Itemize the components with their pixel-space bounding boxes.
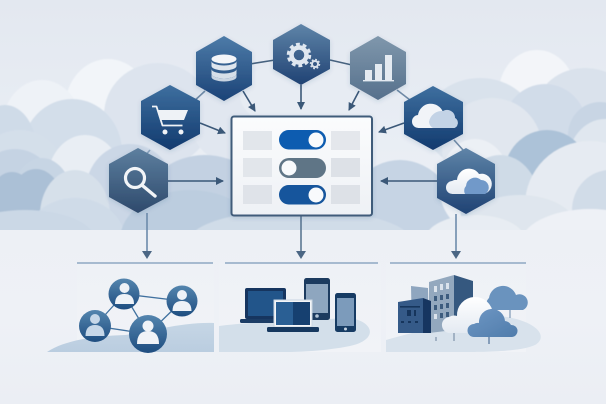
right cloud bank <box>429 50 606 230</box>
arrow: cloud storage to panel <box>381 180 437 182</box>
arrow: search to panel <box>168 180 223 182</box>
left cloud bank <box>0 60 230 230</box>
arrow: cloud to panel <box>379 123 404 132</box>
arrow: panel down to devices <box>300 216 302 256</box>
icon: large gear <box>292 48 306 62</box>
sky background <box>0 0 606 232</box>
ground mound <box>219 318 370 352</box>
right column cells <box>331 131 360 204</box>
network links <box>95 294 182 334</box>
icon: white cloud <box>442 297 502 333</box>
panel: enterprise and cloud <box>386 263 541 352</box>
arrow: search down to network <box>146 213 148 256</box>
toggle: on <box>279 130 326 150</box>
arrow: analytics to panel <box>349 91 359 110</box>
connector lines between source hexagons <box>143 60 463 158</box>
icon: laptop <box>240 288 288 323</box>
left column cells <box>243 131 272 204</box>
hexagon: cloud storage <box>437 148 495 214</box>
panel: devices <box>219 263 381 352</box>
hexagon: settings gears <box>273 24 330 85</box>
hexagon: analytics bar chart <box>350 36 406 100</box>
hexagon: cloud <box>404 86 463 150</box>
icon: user <box>129 315 167 353</box>
hexagon: shopping cart <box>141 85 200 150</box>
toggle: off <box>279 158 326 178</box>
icon: blue front cloud <box>468 309 518 344</box>
icon: back tower <box>411 275 473 333</box>
icon: front laptop <box>267 300 319 332</box>
icon: handset <box>335 293 356 332</box>
panel: people network <box>47 263 214 353</box>
arrow: cloud down to enterprise <box>455 214 457 256</box>
icon: small gear <box>312 61 318 67</box>
icon: user <box>79 310 111 342</box>
icon: user <box>108 278 140 310</box>
ground band <box>0 230 606 404</box>
icon: front building <box>398 298 431 333</box>
ground mound <box>386 316 541 352</box>
arrow: settings to panel <box>300 85 302 109</box>
arrow heads: downward <box>142 251 461 259</box>
building posts <box>436 333 454 341</box>
arrows into the central panel <box>168 85 437 181</box>
toggle: on <box>279 185 326 204</box>
icon: user <box>166 286 198 316</box>
icon: blue back cloud <box>486 286 528 318</box>
cloud backdrop <box>0 50 606 230</box>
arrows down to lower panels <box>147 213 456 256</box>
ground mound <box>47 323 214 352</box>
hexagon: database <box>196 36 252 101</box>
arrow: shopping to panel <box>200 123 225 133</box>
hexagon: search magnifier <box>109 148 168 213</box>
arrow: database to panel <box>243 91 255 111</box>
centre cloud bank <box>122 154 450 230</box>
panel: central control dashboard <box>232 116 372 216</box>
icon: phone <box>304 278 330 320</box>
